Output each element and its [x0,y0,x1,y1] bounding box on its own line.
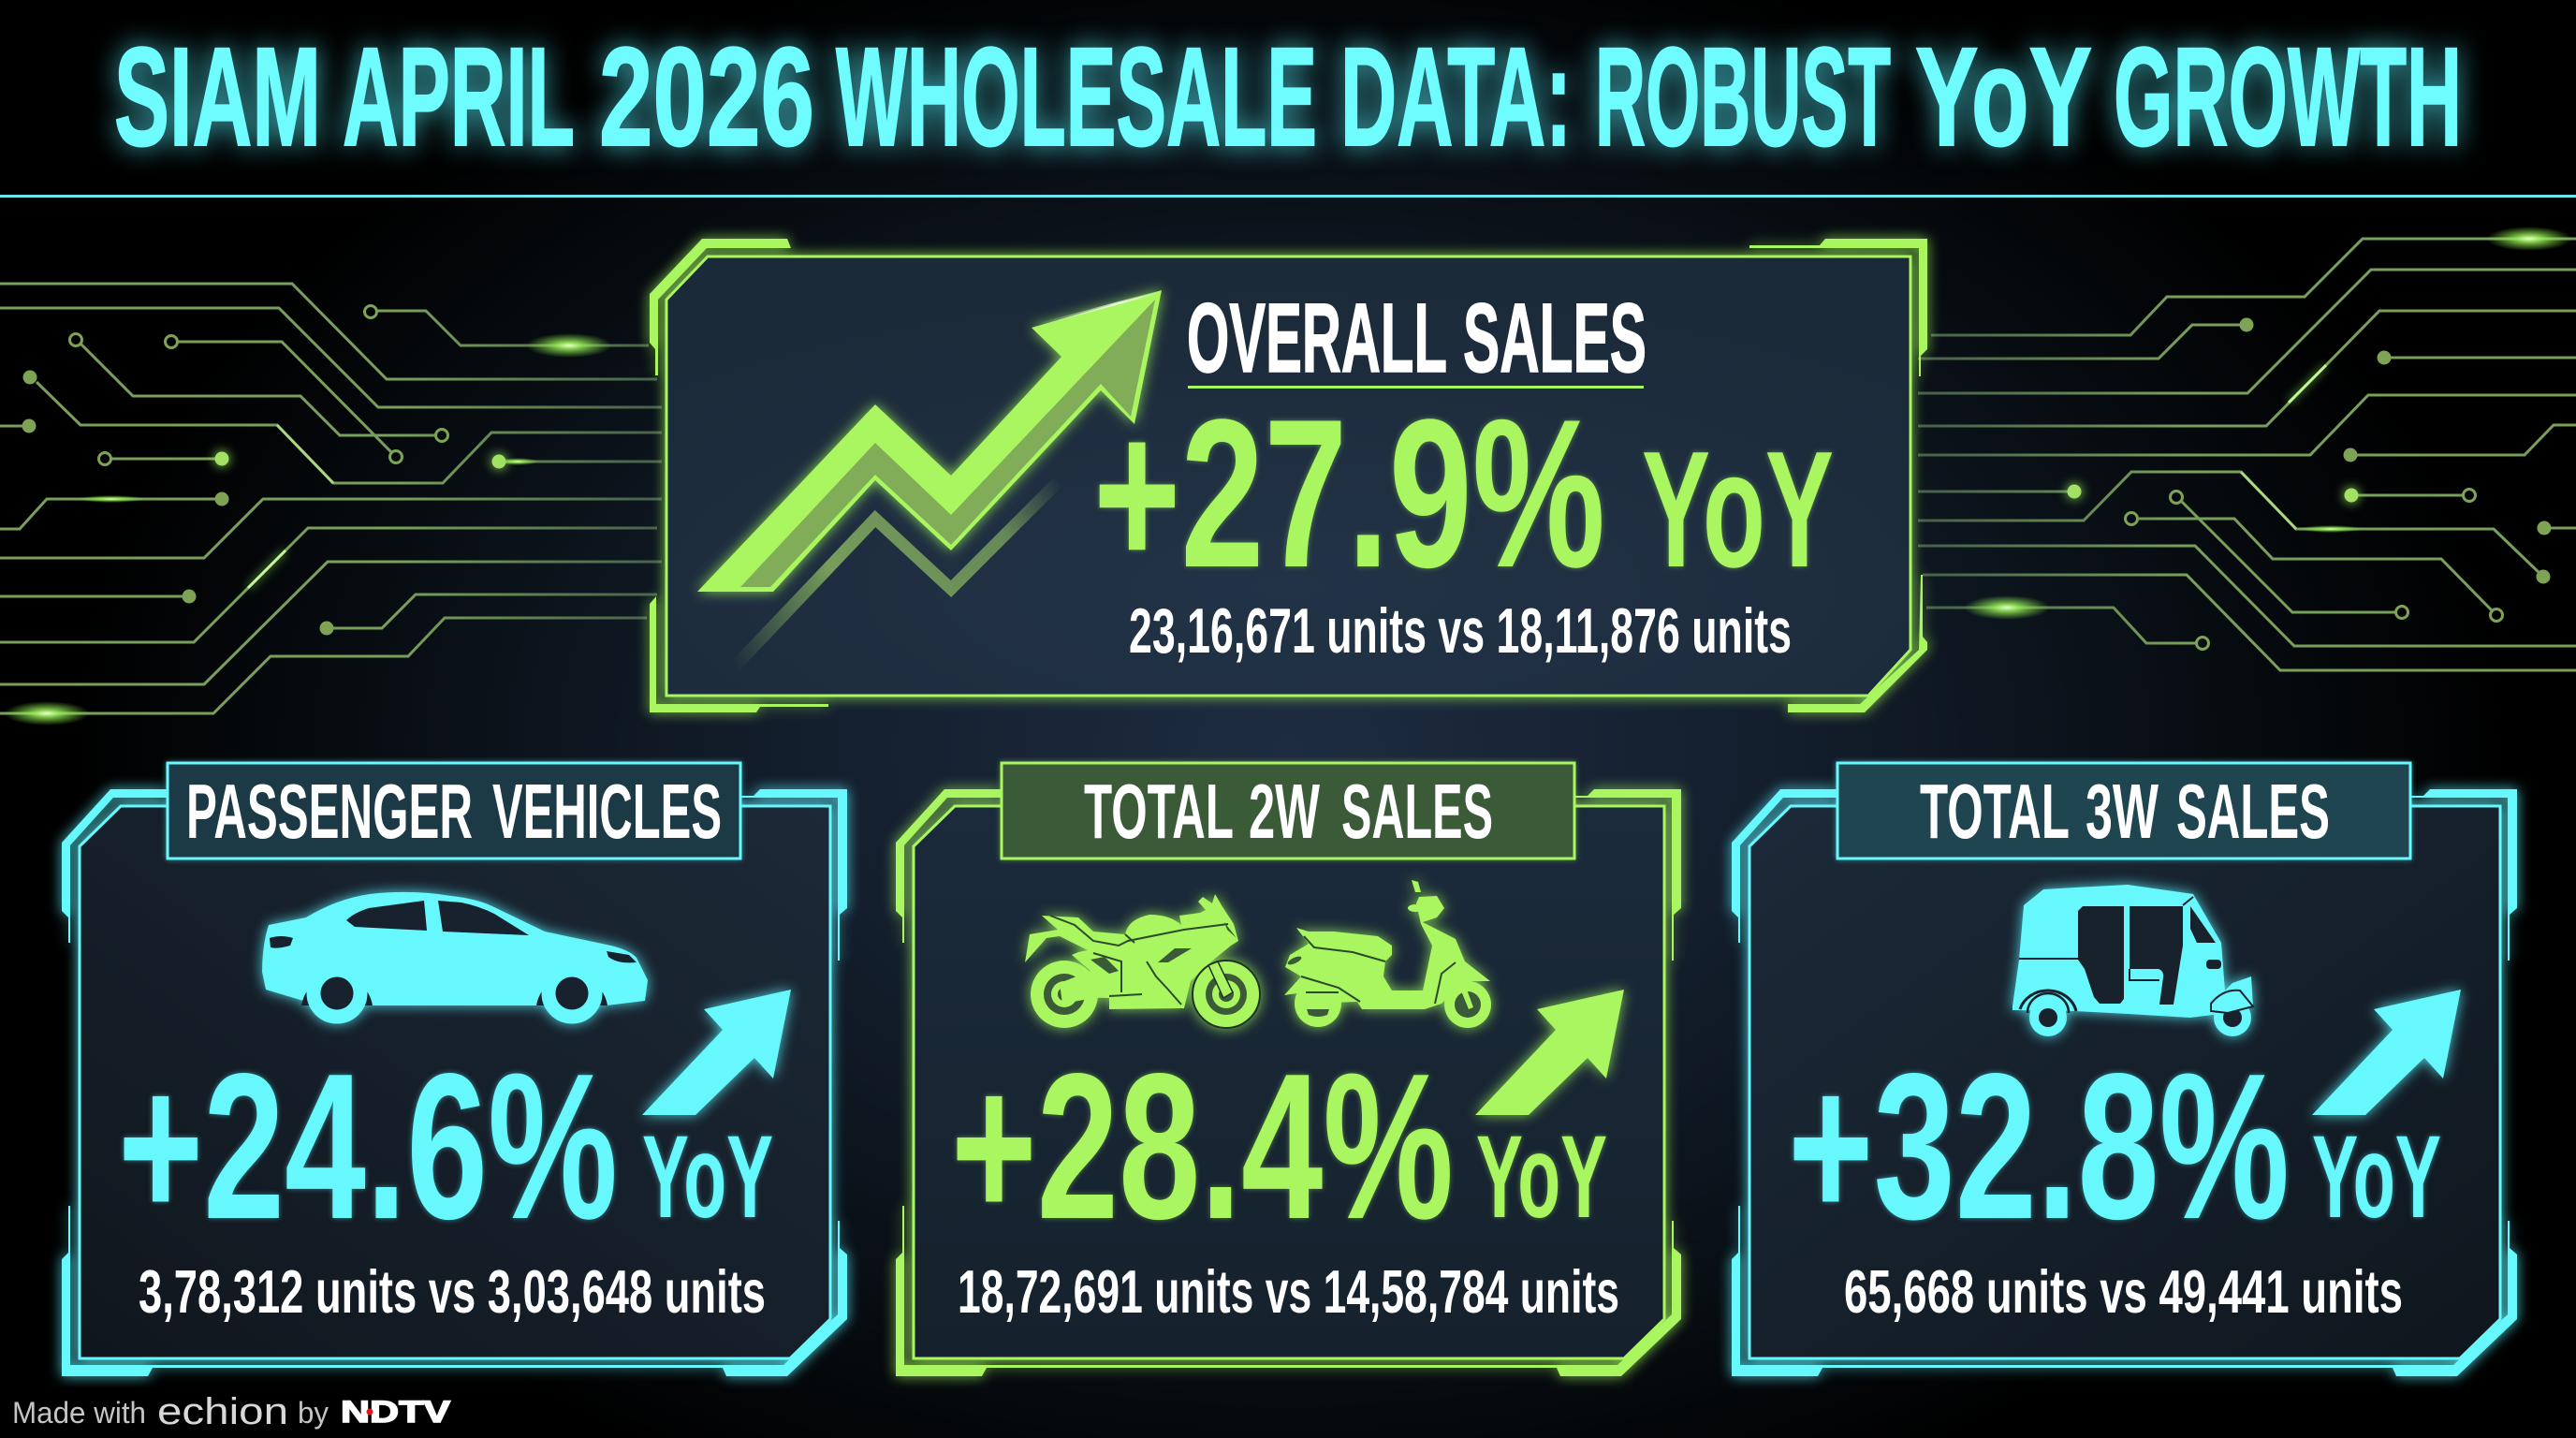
arrow: up [2312,990,2461,1115]
footer: made with echion by NDTV [0,1387,461,1438]
panel frame: 3W [1732,789,2517,1376]
title: APRIL [343,18,575,175]
footer: made with echion by NDTV: echion [157,1391,288,1432]
units comparison: 2W: 18,72,691 units vs 14,58,784 units [958,1257,1619,1326]
icon: growth arrow [697,290,1162,667]
title: YoY [1915,18,2092,175]
label box: PASSENGER [186,768,473,855]
panel: total 2W sales [896,763,1681,1376]
panel: passenger vehicles [62,763,847,1376]
stat label: YoY: YoY [642,1112,773,1242]
label box: 3W [2086,768,2159,855]
panel frame: passenger vehicles [62,789,847,1376]
panel: overall sales [650,239,1927,712]
stat: 2W growth: +28.4% [951,1031,1454,1263]
stat label: YoY: YoY [2312,1112,2441,1242]
stat: passenger vehicles growth: +24.6% [118,1031,618,1263]
label box: VEHICLES [492,768,722,855]
title: WHOLESALE [836,18,1317,175]
title [114,18,2462,175]
icon: motorcycle [1025,894,1260,1028]
heading: overall sales: SALES [1463,284,1647,393]
label box: TOTAL [1920,768,2070,855]
label box [1837,763,2410,858]
stat: overall growth: +27.9% [1093,374,1605,611]
label box: TOTAL [1084,768,1234,855]
icon: scooter [1284,880,1491,1028]
icon: car [262,892,648,1017]
label box: SALES [1341,768,1493,855]
heading: overall sales: OVERALL [1187,284,1447,393]
title: ROBUST [1595,18,1891,175]
units comparison: overall: 23,16,671 units vs 18,11,876 units [1129,595,1792,667]
circuit traces: left [0,284,662,726]
footer: made with echion by NDTV: Made with [12,1396,146,1430]
footer: made with echion by NDTV: by [298,1396,329,1430]
stat label: YoY: YoY [1642,417,1834,602]
title: 2026 [599,18,814,175]
arrow: up [1475,990,1624,1115]
title: DATA: [1340,18,1572,175]
panel frame: overall [650,239,1927,712]
label box: SALES [2176,768,2330,855]
panel frame: 2W [896,789,1681,1376]
panel: total 3W sales [1732,763,2517,1376]
units comparison: passenger vehicles: 3,78,312 units vs 3,03,648 units [139,1257,766,1326]
icon: auto rickshaw [2012,885,2253,1036]
title: SIAM [114,18,321,175]
footer: made with echion by NDTV: NDTV [341,1395,451,1429]
stat: 3W growth: +32.8% [1788,1031,2290,1263]
label box [1002,763,1574,858]
circuit traces: right [1918,227,2576,670]
label box: 2W [1249,768,1320,855]
arrow: up [642,990,791,1115]
stat label: YoY: YoY [1476,1112,1607,1242]
